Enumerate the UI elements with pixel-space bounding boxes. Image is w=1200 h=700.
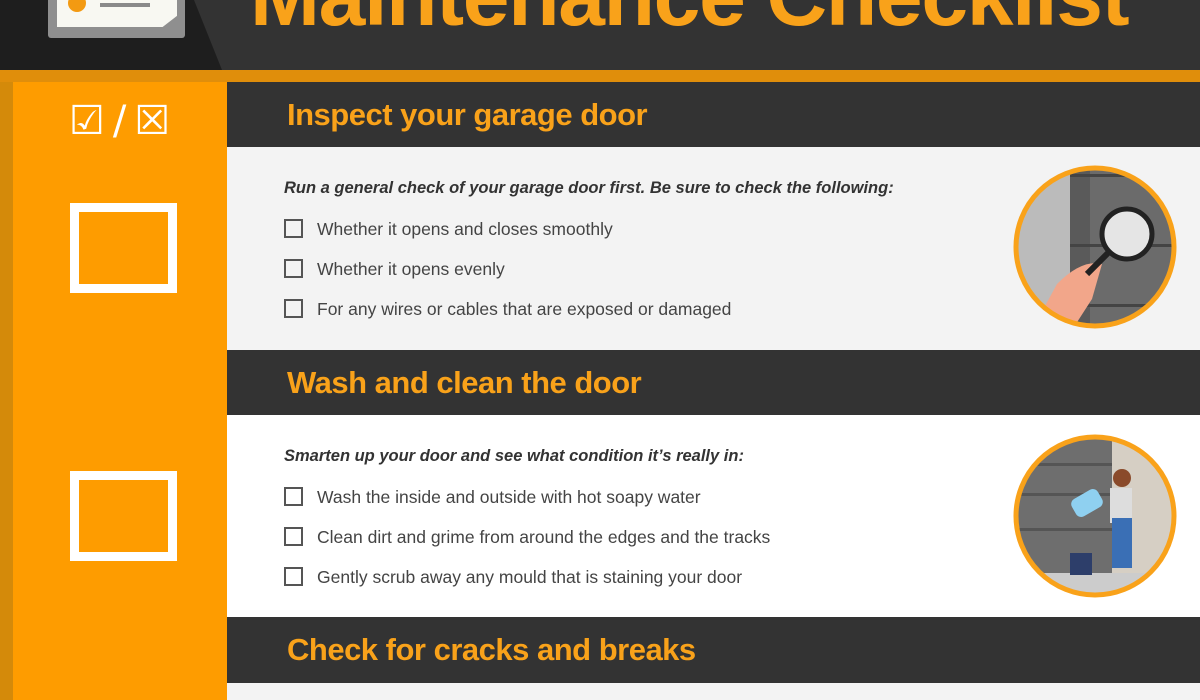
- check/cross legend: ☑/☒: [69, 98, 170, 144]
- section 1 body: [227, 147, 1200, 350]
- icon: magnifier circle: [1014, 166, 1176, 328]
- icon: clipboard card: [48, 0, 185, 38]
- header dark left area: [0, 0, 222, 70]
- icon: cleaning circle: [1014, 434, 1176, 598]
- left orange column: [13, 82, 227, 700]
- checkbox big 1: [70, 203, 177, 293]
- text: Whether it opens evenly: [317, 259, 505, 279]
- left outer border: [0, 82, 13, 700]
- text: Whether it opens and closes smoothly: [317, 219, 613, 239]
- section 3 body: [227, 683, 1200, 700]
- orange stripe: [0, 70, 1200, 82]
- intro 1: Run a general check of your garage door first. Be sure to check the following:: [284, 179, 894, 197]
- text: Clean dirt and grime from around the edges and the tracks: [317, 527, 770, 547]
- section 3 header: [227, 617, 1200, 683]
- text: Gently scrub away any mould that is staining your door: [317, 567, 742, 587]
- section 3 header: Check for cracks and breaks: [287, 632, 696, 667]
- checkbox big 2: [70, 471, 177, 561]
- section 2 header: [227, 350, 1200, 415]
- header bar: [0, 0, 1200, 70]
- text: For any wires or cables that are exposed or damaged: [317, 299, 731, 319]
- item list 2: [284, 487, 770, 587]
- section 1 header: [227, 82, 1200, 147]
- section 1 header: Inspect your garage door: [287, 97, 647, 132]
- intro 2: Smarten up your door and see what condition it’s really in:: [284, 447, 744, 465]
- text: Wash the inside and outside with hot soapy water: [317, 487, 701, 507]
- section 2 header: Wash and clean the door: [287, 365, 641, 400]
- item list 1: [284, 219, 731, 319]
